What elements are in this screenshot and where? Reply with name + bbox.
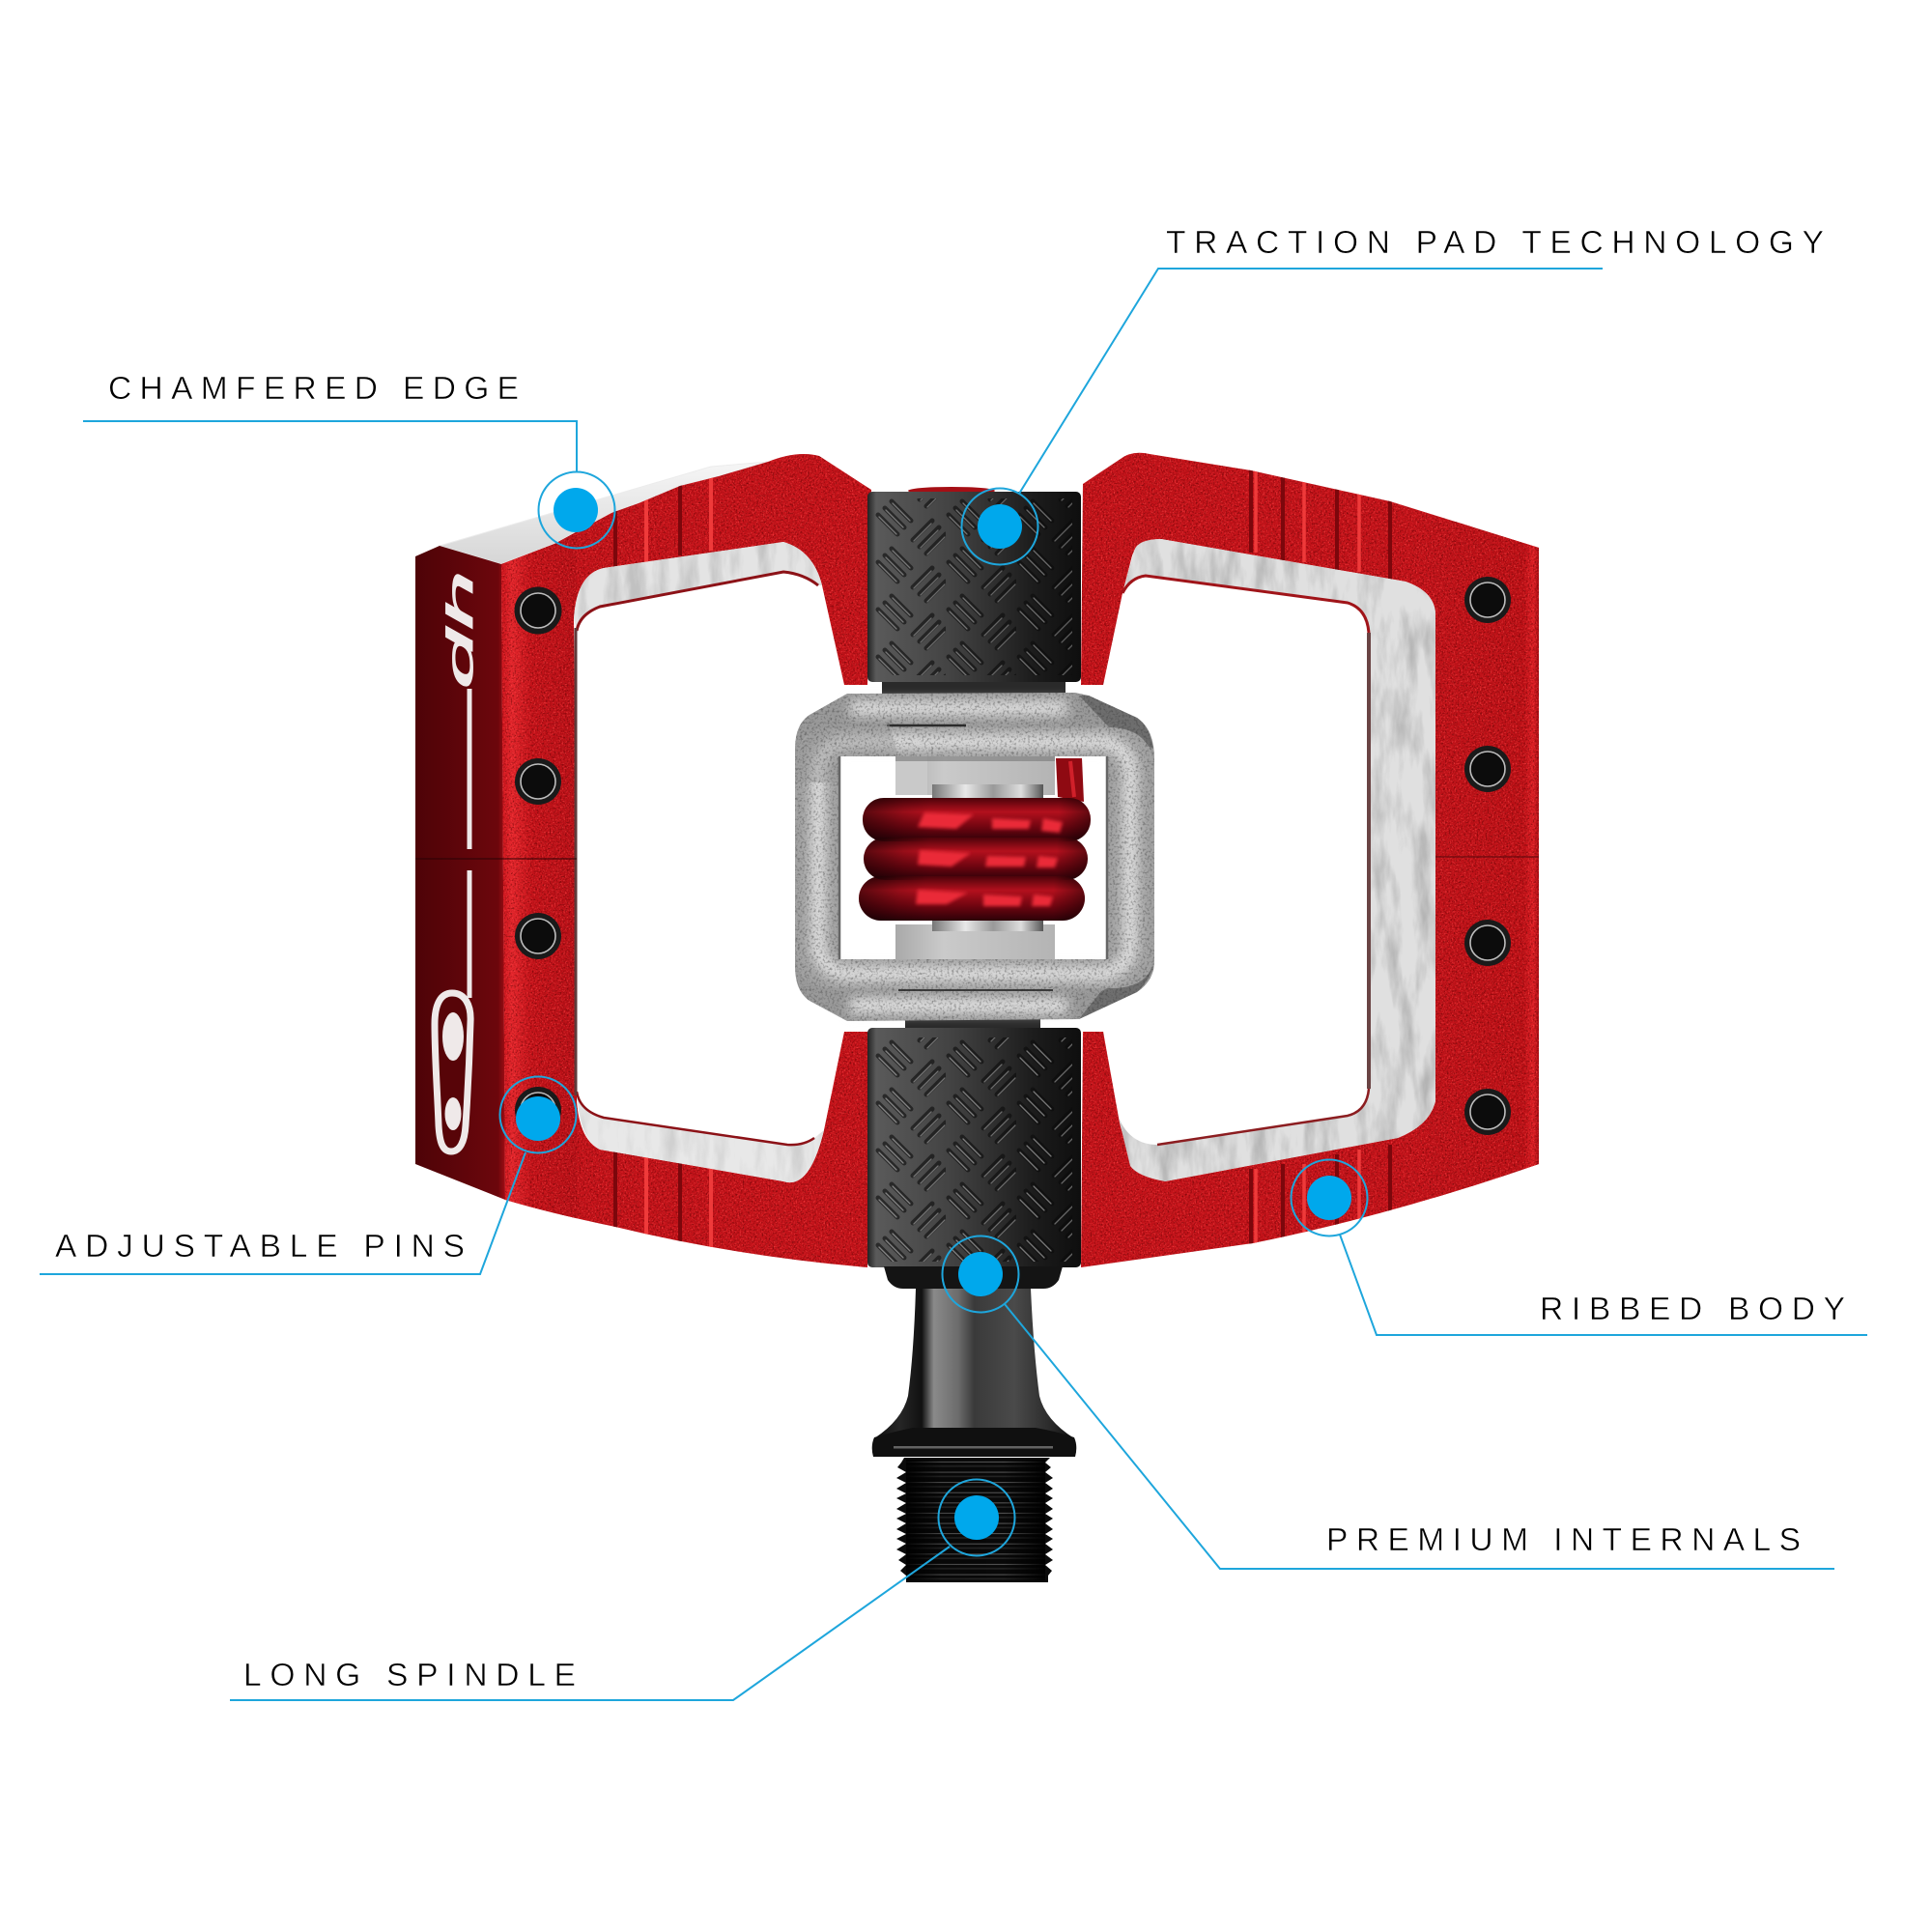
pin (1464, 746, 1511, 792)
spindle flange (872, 1428, 1076, 1457)
pin (515, 913, 561, 959)
traction pad, top (867, 487, 1081, 682)
spring window edges (839, 756, 1107, 959)
marker (943, 1236, 1018, 1312)
label text: ADJUSTABLE PINS (55, 1229, 465, 1264)
marker (1291, 1159, 1368, 1236)
callout: premium internals (943, 1236, 1834, 1569)
callout: ribbed body (1291, 1159, 1867, 1335)
leader line (1340, 1235, 1867, 1335)
spindle axle behind the body (882, 676, 1065, 1030)
shaft and retainers (895, 756, 1055, 795)
ribs on left body (615, 469, 711, 1252)
window inner edge (577, 572, 818, 631)
dh logo on side face (435, 570, 480, 1151)
silver window bevel, bottom (577, 1092, 824, 1182)
callout: adjustable pins (40, 1076, 576, 1274)
front loop of clip (795, 723, 1154, 988)
clip surface texture (795, 693, 1154, 1021)
pedal product illustration (415, 453, 1539, 1582)
pin (515, 1087, 561, 1133)
label text: PREMIUM INTERNALS (1326, 1522, 1801, 1558)
seam across right body (1435, 856, 1539, 858)
callout: chamfered edge (83, 371, 614, 549)
silver window bevel, top (574, 542, 822, 631)
label text: LONG SPINDLE (243, 1658, 576, 1693)
marker (962, 489, 1037, 564)
ribs on right body (1251, 464, 1390, 1251)
callout: long spindle (230, 1480, 1014, 1700)
pin (1464, 1089, 1511, 1135)
threaded end (896, 1458, 1053, 1582)
pin (1464, 920, 1511, 966)
traction pad, bottom (867, 1028, 1081, 1267)
leader line (1005, 1304, 1834, 1569)
black pins / bolts (514, 577, 1511, 1135)
callout: traction pad technology (962, 225, 1824, 564)
pin (515, 758, 561, 805)
label text: TRACTION PAD TECHNOLOGY (1166, 225, 1824, 261)
leader line (230, 1547, 950, 1700)
leader line (1019, 269, 1603, 494)
seam across left body (415, 858, 577, 860)
marker (939, 1480, 1014, 1555)
red anodised front face (501, 454, 871, 1267)
leader line (83, 421, 577, 472)
left pedal body (415, 454, 871, 1267)
label text: CHAMFERED EDGE (108, 371, 519, 407)
crank logo (435, 993, 470, 1151)
logo rules (468, 689, 471, 998)
tapered spindle stem (873, 1289, 1075, 1454)
dark side face with logo area (415, 546, 505, 1200)
pin (1464, 577, 1511, 623)
back loop of clip (795, 693, 1154, 1021)
pin (514, 587, 562, 634)
red coil spring (859, 798, 1091, 921)
dh lettering: dh (440, 570, 480, 689)
right pedal body (1081, 453, 1539, 1267)
pedal spindle (872, 1266, 1076, 1582)
chamfered silver edge, top left (440, 462, 768, 564)
spring clip mechanism (795, 693, 1154, 1021)
marker (539, 471, 614, 549)
label text: RIBBED BODY (1540, 1292, 1845, 1327)
red anodised face (1081, 453, 1539, 1267)
silver window bevel (1119, 539, 1435, 1181)
window inner edge (1122, 576, 1369, 633)
marker (500, 1076, 576, 1153)
leader line (40, 1152, 526, 1274)
collar under pad (884, 1266, 1063, 1289)
